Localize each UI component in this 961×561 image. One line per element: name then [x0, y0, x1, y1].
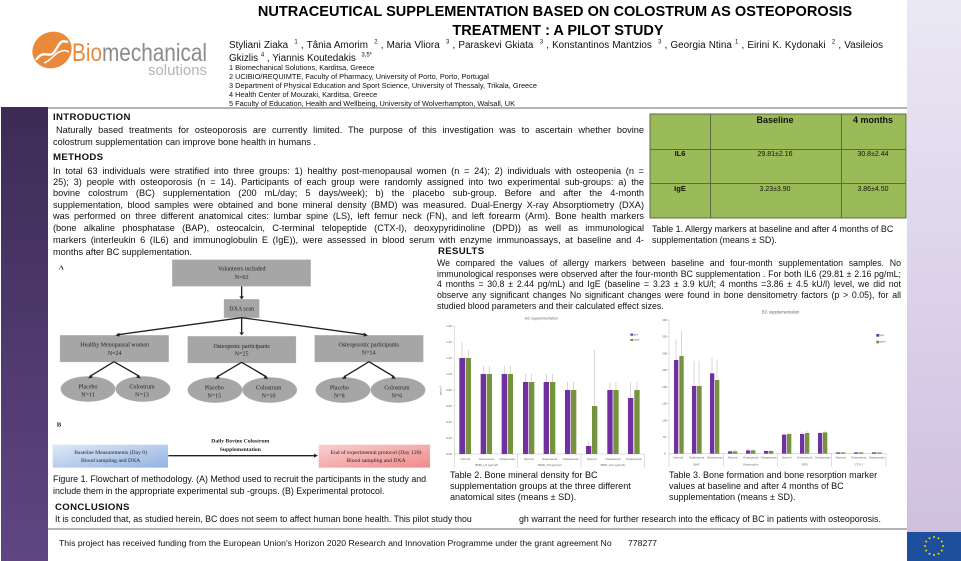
text: results body: 4 months = 30.8 ± 2.44 pg/mL) and IgE (baseline = 3.23 ± 3.9 kU/l; 4 months =3.86 ± 4.5 kU/l) level, we did not [437, 278, 901, 288]
heading: introduction: INTRODUCTION [53, 112, 131, 122]
figure 1: methodology flowchart: N=8 [334, 393, 345, 399]
figure 1: methodology flowchart: Colostrum [256, 386, 282, 392]
table 1: allergy markers: 30.8±2.44 [857, 151, 889, 158]
logo: Biomechanical Solutions [32, 32, 207, 79]
chart: table 3 bone markers: BAP [694, 463, 700, 467]
text: results body [437, 258, 901, 311]
table 1: allergy markers: IL6 [675, 149, 685, 158]
chart: table 2 bone mineral density: Osteopenia [479, 457, 494, 461]
chart: table 3 bone markers: Osteopenia [851, 456, 867, 460]
text: introduction body [53, 125, 644, 147]
chart: table 3 bone markers: 100 [662, 418, 667, 422]
funding statement: This project has received funding from the European Union's Horizon 2020 Research and Innovation Programme under the grant agreement No [59, 538, 612, 548]
text: methods body: supplementation, blood samples were obtained and bone mineral density (BMD) was measured. Dual-Energy X-ray Absorptiometry (DXA) [53, 200, 644, 210]
panel: methods [53, 152, 644, 257]
text: introduction body: colostrum supplementation can improve bone health in humans . [53, 136, 316, 146]
heading: results: RESULTS [438, 246, 485, 257]
figure 1 caption: include them in the appropriate experimental sub -groups. (B) Experimental protocol. [53, 486, 384, 496]
chart: table 3 bone markers: Osteporosis [761, 456, 777, 460]
footer divider [48, 528, 907, 530]
table 1: allergy markers: 4 months [853, 115, 893, 125]
table 3 caption: supplementation (means ± SD). [669, 492, 796, 502]
logo: Biomechanical Solutions: solutions [148, 63, 207, 79]
table 1 caption: supplementation (means ± SD). [652, 235, 777, 245]
affiliations [229, 63, 537, 108]
table 2 caption: Table 2. Bone mineral density for BC [450, 470, 598, 480]
chart: table 2 bone mineral density: 0,00 [446, 452, 452, 456]
heading: methods: METHODS [53, 152, 103, 163]
figure 1: methodology flowchart: A [59, 264, 64, 271]
chart: table 3 bone markers: Osteocalcin [743, 463, 759, 467]
table 1: allergy markers: 3.86±4.50 [857, 186, 889, 193]
chart: table 2 bone mineral density: 1,40 [446, 340, 452, 344]
chart: table 2 bone mineral density: Osteopenia [542, 457, 558, 461]
chart: table 3 bone markers: 250 [662, 368, 667, 372]
logo: Biomechanical Solutions: mechanical [102, 39, 207, 67]
chart: table 2 bone mineral density: BMD_Arm (g/cm2) [601, 463, 625, 467]
left purple side band [1, 107, 48, 561]
text: results body: studied blood parameters and their calculated effect sizes. [437, 300, 664, 310]
title [258, 4, 852, 38]
table 3 caption [669, 470, 877, 502]
chart: table 2 bone mineral density: Osteporosis [626, 457, 642, 461]
figure 1: methodology flowchart: B [57, 422, 62, 429]
figure 1: methodology flowchart: Blood sampling and DXA [81, 458, 141, 464]
chart: table 3 bone markers: 350 [662, 335, 667, 339]
figure 1: methodology flowchart: Osteopenic participants [213, 344, 270, 350]
figure 1: methodology flowchart: Healthy Menopausal women [80, 343, 149, 349]
chart: table 2 bone mineral density: BMD_LS (g/cm2) [475, 463, 498, 467]
figure 1 caption: Figure 1. Flowchart of methodology. (A) Method used to recruit the participants in the study and [53, 474, 426, 484]
table 2 caption: supplementation groups at the three different [450, 481, 631, 491]
title: NUTRACEUTICAL SUPPLEMENTATION BASED ON COLOSTRUM AS OSTEOPOROSIS [258, 4, 852, 20]
table 2 caption [450, 470, 631, 502]
panel: results [437, 246, 901, 311]
figure 1: methodology flowchart: Baseline Measurements (Day 0) [74, 449, 147, 456]
text: introduction body: Naturally based treatments for osteoporosis are currently limited. The purpose of this investigation was to ascertain whether bovine [56, 125, 644, 135]
chart: table 2 bone mineral density: 1,60 [446, 324, 452, 328]
chart: table 3 bone markers: Osteopenia [689, 456, 705, 460]
table 1: allergy markers: 3.23±3.90 [759, 186, 791, 193]
affiliations: 5 Faculty of Education, Health and Wellbeing, University of Wolverhampton, Walsall, UK [229, 99, 515, 108]
chart: table 3 bone markers: post [880, 340, 886, 344]
figure 1: methodology flowchart: N=6 [392, 393, 402, 399]
logo: Biomechanical Solutions: Bio [72, 39, 102, 67]
text: methods body: markers (interleukin 6 (IL6) and immunoglobulin E (IgE)), were assessed in blood serum with enzyme immunoassays, at baseline and 4- [53, 234, 644, 244]
chart: table 3 bone markers: 50 [663, 435, 667, 439]
figure 1: methodology flowchart: End of experimental protocol (Day 120) [330, 449, 422, 456]
figure 1: methodology flowchart: N=11 [81, 392, 95, 398]
figure 1: methodology flowchart: Supplementation [220, 447, 262, 453]
figure 1: methodology flowchart: Colostrum [384, 385, 410, 391]
figure 1: methodology flowchart: N=63 [235, 275, 248, 281]
text: methods body: (bone alkaline phosphatase (BAP), osteocalcin, C-terminal telopeptide (CTX-I), deoxypyridinoline (DPD)) as well as immunological [53, 222, 644, 232]
title: TREATMENT : A PILOT STUDY [452, 22, 664, 38]
table 1: allergy markers: 29.81±2.16 [758, 151, 793, 158]
chart: table 2 bone mineral density: Osteopenia [605, 457, 621, 461]
figure 1: methodology flowchart: DXA scan [229, 307, 254, 313]
chart: table 2 bone mineral density: 1,00 [446, 372, 452, 376]
chart: table 3 bone markers: Normal [728, 456, 738, 460]
table 3 caption: Table 3. Bone formation and bone resorption marker [669, 470, 877, 480]
table 1: allergy markers: IgE [674, 184, 686, 193]
chart: table 2 bone mineral density: pre [634, 332, 638, 336]
figure 1 caption [53, 474, 426, 496]
chart: table 3 bone markers: 200 [662, 385, 667, 389]
chart: table 3 bone markers: DPD [801, 463, 809, 467]
table 3 caption: values at baseline and after 4 months of BC [669, 481, 844, 491]
chart: table 2 bone mineral density: Normal [587, 457, 597, 461]
chart: table 2 bone mineral density: Osteporosis [499, 457, 516, 461]
chart: table 2 bone mineral density: 0,40 [446, 420, 452, 424]
authors [229, 39, 883, 64]
affiliations: 1 Biomechanical Solutions, Karditsa, Greece [229, 63, 374, 72]
chart: table 3 bone markers: Osteporosis [869, 456, 885, 460]
figure 1: methodology flowchart: N=14 [362, 350, 375, 356]
figure 1: methodology flowchart: Placebo [205, 386, 224, 392]
figure 1: methodology flowchart: Placebo [79, 384, 97, 390]
chart: table 3 bone markers: 0 [664, 452, 666, 456]
table 1 caption [652, 224, 893, 245]
text: methods body: 25); 3) people with osteoporosis (n = 14). Participants of each group were randomly assigned into two experimental sub-groups: a) the [53, 176, 644, 186]
table 2 caption: anatomical sites (means ± SD). [450, 492, 576, 502]
figure 1: methodology flowchart: N=13 [135, 392, 149, 398]
panel: introduction [53, 112, 644, 147]
chart: table 2 bone mineral density: 1,20 [446, 356, 452, 360]
text: conclusions body: It is concluded that, as studied herein, BC does not seem to affect human bone health. This pilot study thou [55, 514, 472, 524]
text: methods body: bovine colostrum (BC) supplementation (200 mL/day; 5 days/week); b) the placebo sub-group. Before and after the 4-month [53, 188, 644, 198]
figure 1: methodology flowchart: Colostrum [129, 384, 155, 390]
table 1 caption: Table 1. Allergy markers at baseline and after 4 months of BC [652, 224, 893, 234]
chart: table 2 bone mineral density: Normal [524, 457, 534, 461]
text: methods body [53, 166, 644, 257]
chart: table 2 bone mineral density: Normal [461, 457, 470, 461]
chart: table 2 bone mineral density: post [634, 338, 640, 342]
text: conclusions body [55, 514, 881, 524]
figure 1: methodology flowchart: N=15 [207, 394, 221, 400]
text: methods body: In total 63 individuals were stratified into three groups: 1) healthy post-menopausal women (n = 24); 2) individuals with osteopenia (n = [53, 166, 644, 176]
chart: table 2 bone mineral density: BMD_FN (g/cm2) [538, 463, 562, 467]
header divider [48, 107, 907, 109]
chart: table 3 bone markers: Osteopenia [743, 456, 759, 460]
figure 1: methodology flowchart: Placebo [330, 385, 349, 391]
chart: table 3 bone markers: CTX-I [855, 463, 863, 467]
text: results body: We compared the values of allergy markers between baseline and four-month supplementation samples. No [437, 258, 901, 268]
figure 1: methodology flowchart: Osteoporotic participants [338, 343, 399, 349]
text: methods body: months after BC supplementation. [53, 246, 192, 256]
figure 1: methodology flowchart: Blood sampling and DXA [346, 458, 406, 464]
authors: Gkizlis 4 , Yiannis Koutedakis 3,5* [229, 53, 372, 64]
right lavender side band [907, 0, 961, 532]
affiliations: 3 Department of Physical Education and Sport Science, University of Thessaly, Trikala, Greece [229, 81, 537, 90]
chart: table 3 bone markers: BC supplementation [762, 310, 800, 315]
chart: table 3 bone markers: Osteporosis [707, 456, 723, 460]
figure 1: methodology flowchart: N=24 [108, 351, 122, 357]
figure 1: methodology flowchart: N=25 [235, 352, 248, 358]
chart: table 2 bone mineral density: BC supplementation [525, 317, 558, 321]
figure 1: methodology flowchart: Volunteers included [218, 267, 265, 273]
chart: table 3 bone markers: pre [880, 333, 884, 337]
table 1: allergy markers: Baseline [756, 115, 794, 125]
heading: conclusions: CONCLUSIONS [55, 502, 130, 513]
chart: table 2 bone mineral density: Osteporosis [563, 457, 579, 461]
text: results body: observe any significant changes No significant changes were found in bone densitometry factors (p > 0.05), for all [437, 290, 901, 300]
chart: table 3 bone markers: Normal [782, 456, 792, 460]
affiliations: 2 UCIBIO/REQUIMTE, Faculty of Pharmacy, University of Porto, Porto, Portugal [229, 72, 489, 81]
authors: Styliani Ziaka 1 , Tânia Amorim 2 , Maria Vliora 3 , Paraskevi Gkiata 3 , Konstantinos Mantzios 3 , Georgia Ntina 1 , Eirini K. Kydonaki 2 , Vasileios [229, 40, 883, 51]
chart: table 2 bone mineral density: 0,20 [446, 436, 452, 440]
text: methods body: was performed on three different anatomical cites: lumbar spine (LS), left femur neck (FN), and left forearm (Arm). Bone health markers [53, 210, 644, 220]
chart: table 3 bone markers: Normal [836, 456, 846, 460]
chart: table 3 bone markers: 300 [662, 351, 667, 355]
icon: EU flag [907, 532, 961, 561]
chart: table 3 bone markers: Normal [674, 456, 683, 460]
funding statement: 778277 [628, 538, 657, 548]
chart: table 3 bone markers: Osteopenia [797, 456, 813, 460]
figure 1: methodology flowchart: N=10 [262, 394, 275, 400]
text: results body: immunological responses were observed after the four-month BC supplementation . For both IL6 (29.81 ± 2.16 pg/mL; [437, 268, 901, 278]
chart: table 2 bone mineral density: 0,80 [446, 388, 452, 392]
text: conclusions body: gh warrant the need for further research into the efficacy of BC in patients with osteoporosis. [519, 514, 881, 524]
chart: table 3 bone markers: 400 [662, 318, 667, 322]
chart: table 2 bone mineral density: g/cm 2 [439, 386, 443, 395]
figure 1: methodology flowchart: Daily Bovine Colostrum [211, 439, 270, 445]
chart: table 3 bone markers: Osteporosis [815, 456, 831, 460]
affiliations: 4 Health Center of Mouzaki, Karditsa, Greece [229, 90, 377, 99]
panel: conclusions [55, 502, 881, 524]
chart: table 2 bone mineral density: 0,60 [446, 404, 452, 408]
chart: table 3 bone markers: 150 [662, 402, 667, 406]
